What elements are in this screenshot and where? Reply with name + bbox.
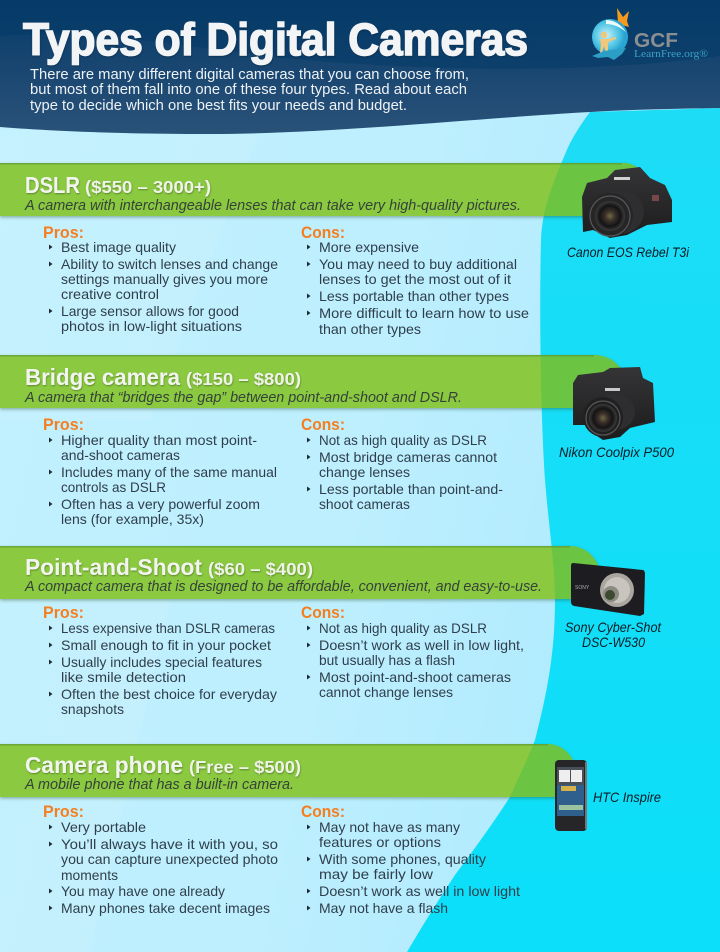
logo: GCF LearnFree.org: LearnFree.org® [634, 48, 708, 60]
cons list: Less portable than other types [319, 288, 509, 304]
pros list: you can capture unexpected photo [61, 851, 278, 867]
caption: Sony Cyber-Shot DSC-W530: Sony Cyber-Shot [565, 619, 662, 635]
title: Types of Digital Cameras [23, 14, 528, 65]
heading: Camera phone: Camera phone [25, 752, 183, 778]
cons list [307, 620, 524, 700]
cons heading: Cons: [301, 604, 345, 622]
pros list [49, 239, 278, 334]
icon: Nikon bridge camera [573, 367, 655, 440]
cons list: Not as high quality as DSLR [319, 620, 487, 636]
pros list [49, 620, 277, 717]
icon: HTC smartphone [555, 760, 587, 831]
pros list: settings manually gives you more [61, 271, 268, 287]
pros heading: Pros: [43, 416, 84, 434]
cons list [307, 432, 503, 512]
pros list: and-shoot cameras [61, 447, 180, 463]
cons list: Not as high quality as DSLR [319, 432, 487, 448]
header banner [0, 0, 720, 134]
cons list: You may need to buy additional [319, 256, 517, 272]
caption: HTC Inspire: HTC Inspire [593, 789, 661, 805]
pros list: photos in low-light situations [61, 318, 242, 334]
cons heading: Cons: [301, 224, 345, 242]
pros list: Often has a very powerful zoom [61, 496, 260, 512]
pros list: You’ll always have it with you, so [61, 836, 278, 852]
icon: Canon DSLR camera [582, 167, 672, 238]
pros heading: Pros: [43, 604, 84, 622]
pros list: lens (for example, 35x) [61, 511, 204, 527]
panel: DSLR [24, 167, 690, 337]
price: DSLR: ($550 – 3000+) [85, 177, 211, 197]
description: DSLR: A camera with interchangeable lenses that can take very high-quality pictures. [24, 197, 521, 214]
background: cyan curved area [407, 108, 720, 952]
intro text: There are many different digital cameras that you can choose from, [30, 66, 469, 83]
cons list: Less portable than point-and- [319, 481, 503, 497]
green bands (over cyan area) [510, 163, 637, 797]
pros list: Ability to switch lenses and change [61, 256, 278, 272]
caption: Nikon Coolpix P500: Nikon Coolpix P500 [559, 444, 674, 460]
caption: Canon EOS Rebel T3i: Canon EOS Rebel T3i [567, 244, 690, 260]
cons list: Doesn’t work as well in low light [319, 883, 520, 899]
cons list: May not have as many [319, 819, 460, 835]
intro text: but most of them fall into one of these four types. Read about each [30, 81, 467, 98]
pros list: Many phones take decent images [61, 900, 270, 916]
pros list: Large sensor allows for good [61, 303, 239, 319]
pros list: moments [61, 867, 118, 883]
cons heading: Cons: [301, 416, 345, 434]
pros list: You may have one already [61, 883, 225, 899]
pros heading: Pros: [43, 803, 84, 821]
cons list: shoot cameras [319, 496, 410, 512]
cons list: Most bridge cameras cannot [319, 449, 497, 465]
cons list: lenses to get the most out of it [319, 271, 511, 287]
price: Camera phone: (Free – $500) [189, 757, 301, 777]
background: lighter facets [0, 130, 260, 952]
pros list: Less expensive than DSLR cameras [61, 620, 275, 636]
pros list: Higher quality than most point- [61, 432, 257, 448]
caption: Sony Cyber-Shot DSC-W530: DSC-W530 [582, 634, 645, 650]
pros list: Often the best choice for everyday [61, 686, 277, 702]
cons list: With some phones, quality [319, 851, 486, 867]
intro text: type to decide which one best fits your needs and budget. [30, 97, 407, 114]
cons list: may be fairly low [319, 866, 434, 882]
pros list [49, 819, 278, 916]
caption: Sony Cyber-Shot DSC-W530 [565, 619, 662, 650]
pros list: controls as DSLR [61, 479, 166, 495]
pros list: Usually includes special features [61, 654, 262, 670]
cons list: change lenses [319, 464, 410, 480]
panel: Camera phone [24, 752, 661, 916]
logo: GCF LearnFree.org [592, 8, 708, 60]
cons list: May not have a flash [319, 900, 448, 916]
cons list: but usually has a flash [319, 652, 455, 668]
green bands (base) [0, 163, 642, 797]
description: Point-and-Shoot: A compact camera that is designed to be affordable, convenient, and easy-to-use. [24, 578, 542, 595]
pros list: Very portable [61, 819, 146, 835]
logo: GCF LearnFree.org: GCF [634, 30, 678, 52]
cons list: More difficult to learn how to use [319, 305, 529, 321]
cons list: Most point-and-shoot cameras [319, 669, 511, 685]
pros heading: Pros: [43, 224, 84, 242]
icon: Sony compact camera: SONY [575, 585, 590, 591]
pros list: Small enough to fit in your pocket [61, 637, 271, 653]
pros list: Includes many of the same manual [61, 464, 277, 480]
pros list: Best image quality [61, 239, 176, 255]
cons heading: Cons: [301, 803, 345, 821]
price: Point-and-Shoot: ($60 – $400) [208, 559, 313, 579]
cons list [307, 239, 529, 337]
heading: Point-and-Shoot: Point-and-Shoot [25, 554, 202, 580]
cons list: cannot change lenses [319, 684, 453, 700]
panel: Point-and-Shoot [24, 554, 662, 717]
heading: DSLR: DSLR [25, 172, 80, 198]
cons list: Doesn’t work as well in low light, [319, 637, 524, 653]
pros list: creative control [61, 286, 159, 302]
cons list: features or options [319, 834, 441, 850]
price: Bridge camera: ($150 – $800) [186, 369, 301, 389]
intro text [30, 66, 469, 114]
description: Bridge camera: A camera that “bridges the gap” between point-and-shoot and DSLR. [24, 389, 462, 406]
cons list: More expensive [319, 239, 419, 255]
pros list: snapshots [61, 701, 124, 717]
panel: Bridge camera [24, 364, 674, 527]
cons list [307, 819, 520, 916]
pros list [49, 432, 277, 527]
icon: Sony compact camera [571, 563, 645, 616]
pros list: like smile detection [61, 669, 186, 685]
cons list: than other types [319, 321, 421, 337]
description: Camera phone: A mobile phone that has a built-in camera. [24, 776, 294, 793]
heading: Bridge camera: Bridge camera [25, 364, 180, 390]
